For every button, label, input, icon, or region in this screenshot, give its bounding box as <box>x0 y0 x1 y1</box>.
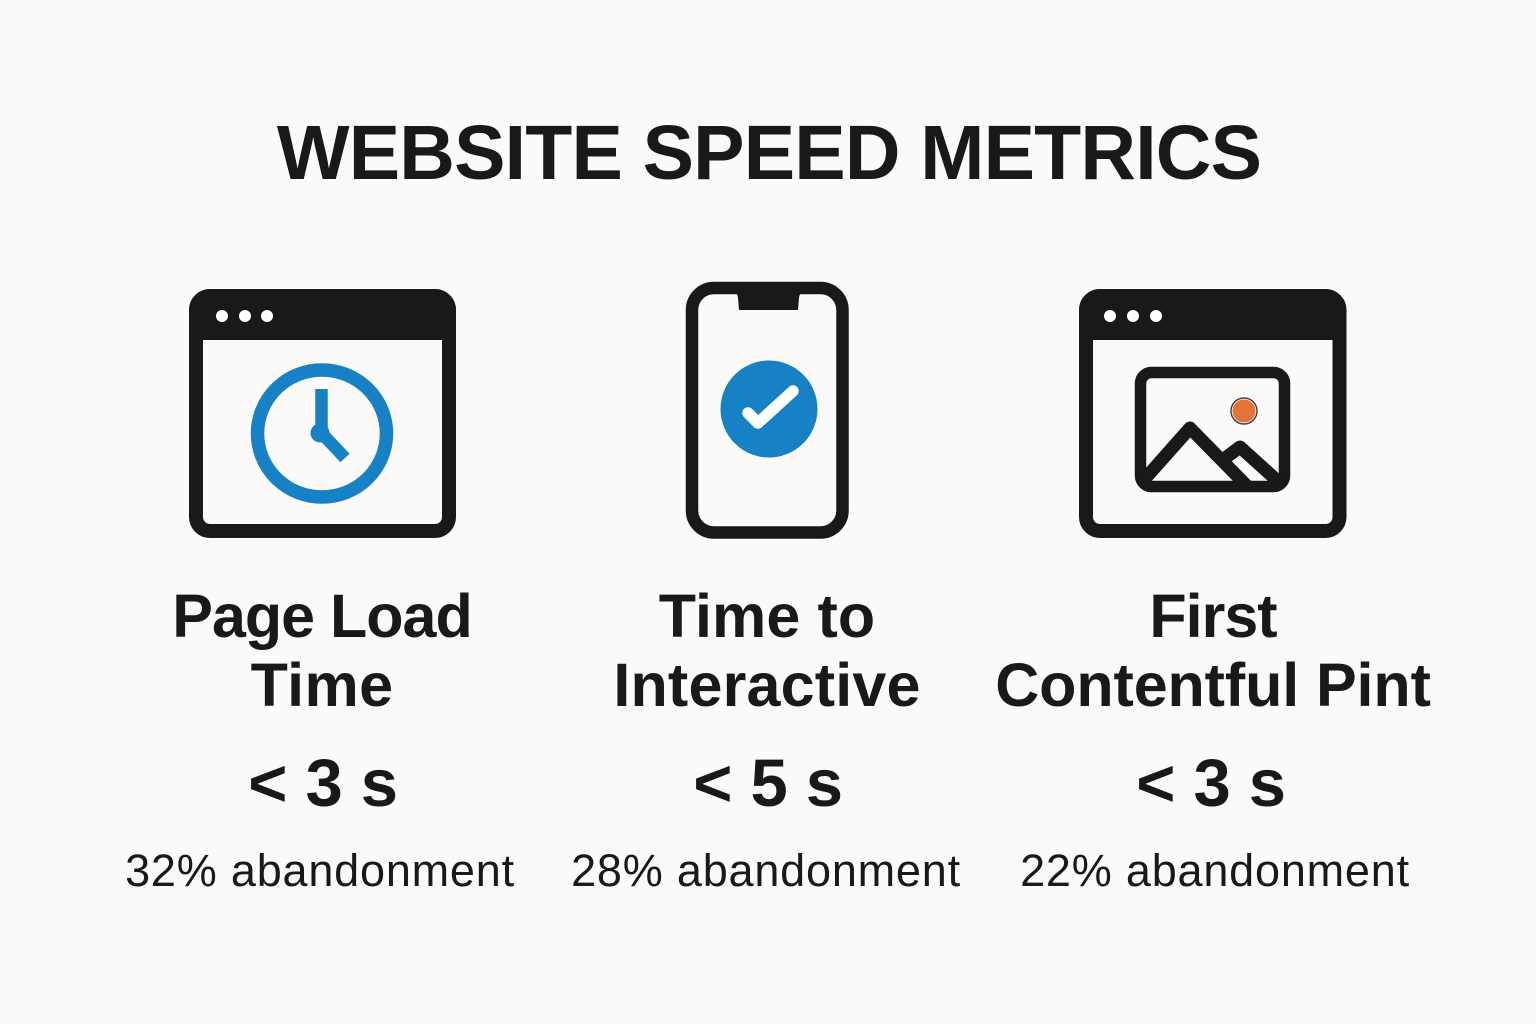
abandonment: 22%: 22% abandonment <box>1020 845 1410 896</box>
icon: browser with clock <box>189 289 456 531</box>
metric name: Time to Interactive <box>613 582 921 719</box>
title: WEBSITE SPEED METRICS <box>277 110 1261 196</box>
metric name: First Contentful Paint: Contentful Pint <box>995 651 1431 719</box>
icon: browser with image <box>1079 289 1346 531</box>
value: under 5 s: < 5 s <box>693 746 843 821</box>
abandonment: 32%: 32% abandonment <box>125 845 515 896</box>
metric name: First Contentful Paint <box>995 582 1431 719</box>
metric name: Page Load Time <box>172 582 472 719</box>
icon: phone with check <box>692 288 842 532</box>
metric name: First Contentful Paint: First <box>1149 582 1277 650</box>
metric name: Time to Interactive: Time to <box>659 582 875 650</box>
abandonment: 28%: 28% abandonment <box>571 845 961 896</box>
metric name: Page Load Time: Page Load <box>172 582 472 650</box>
value: under 3 s: < 3 s <box>248 746 398 821</box>
value: under 3 s: < 3 s <box>1136 746 1286 821</box>
metric name: Page Load Time: Time <box>251 651 393 719</box>
metric name: Time to Interactive: Interactive <box>613 651 921 719</box>
